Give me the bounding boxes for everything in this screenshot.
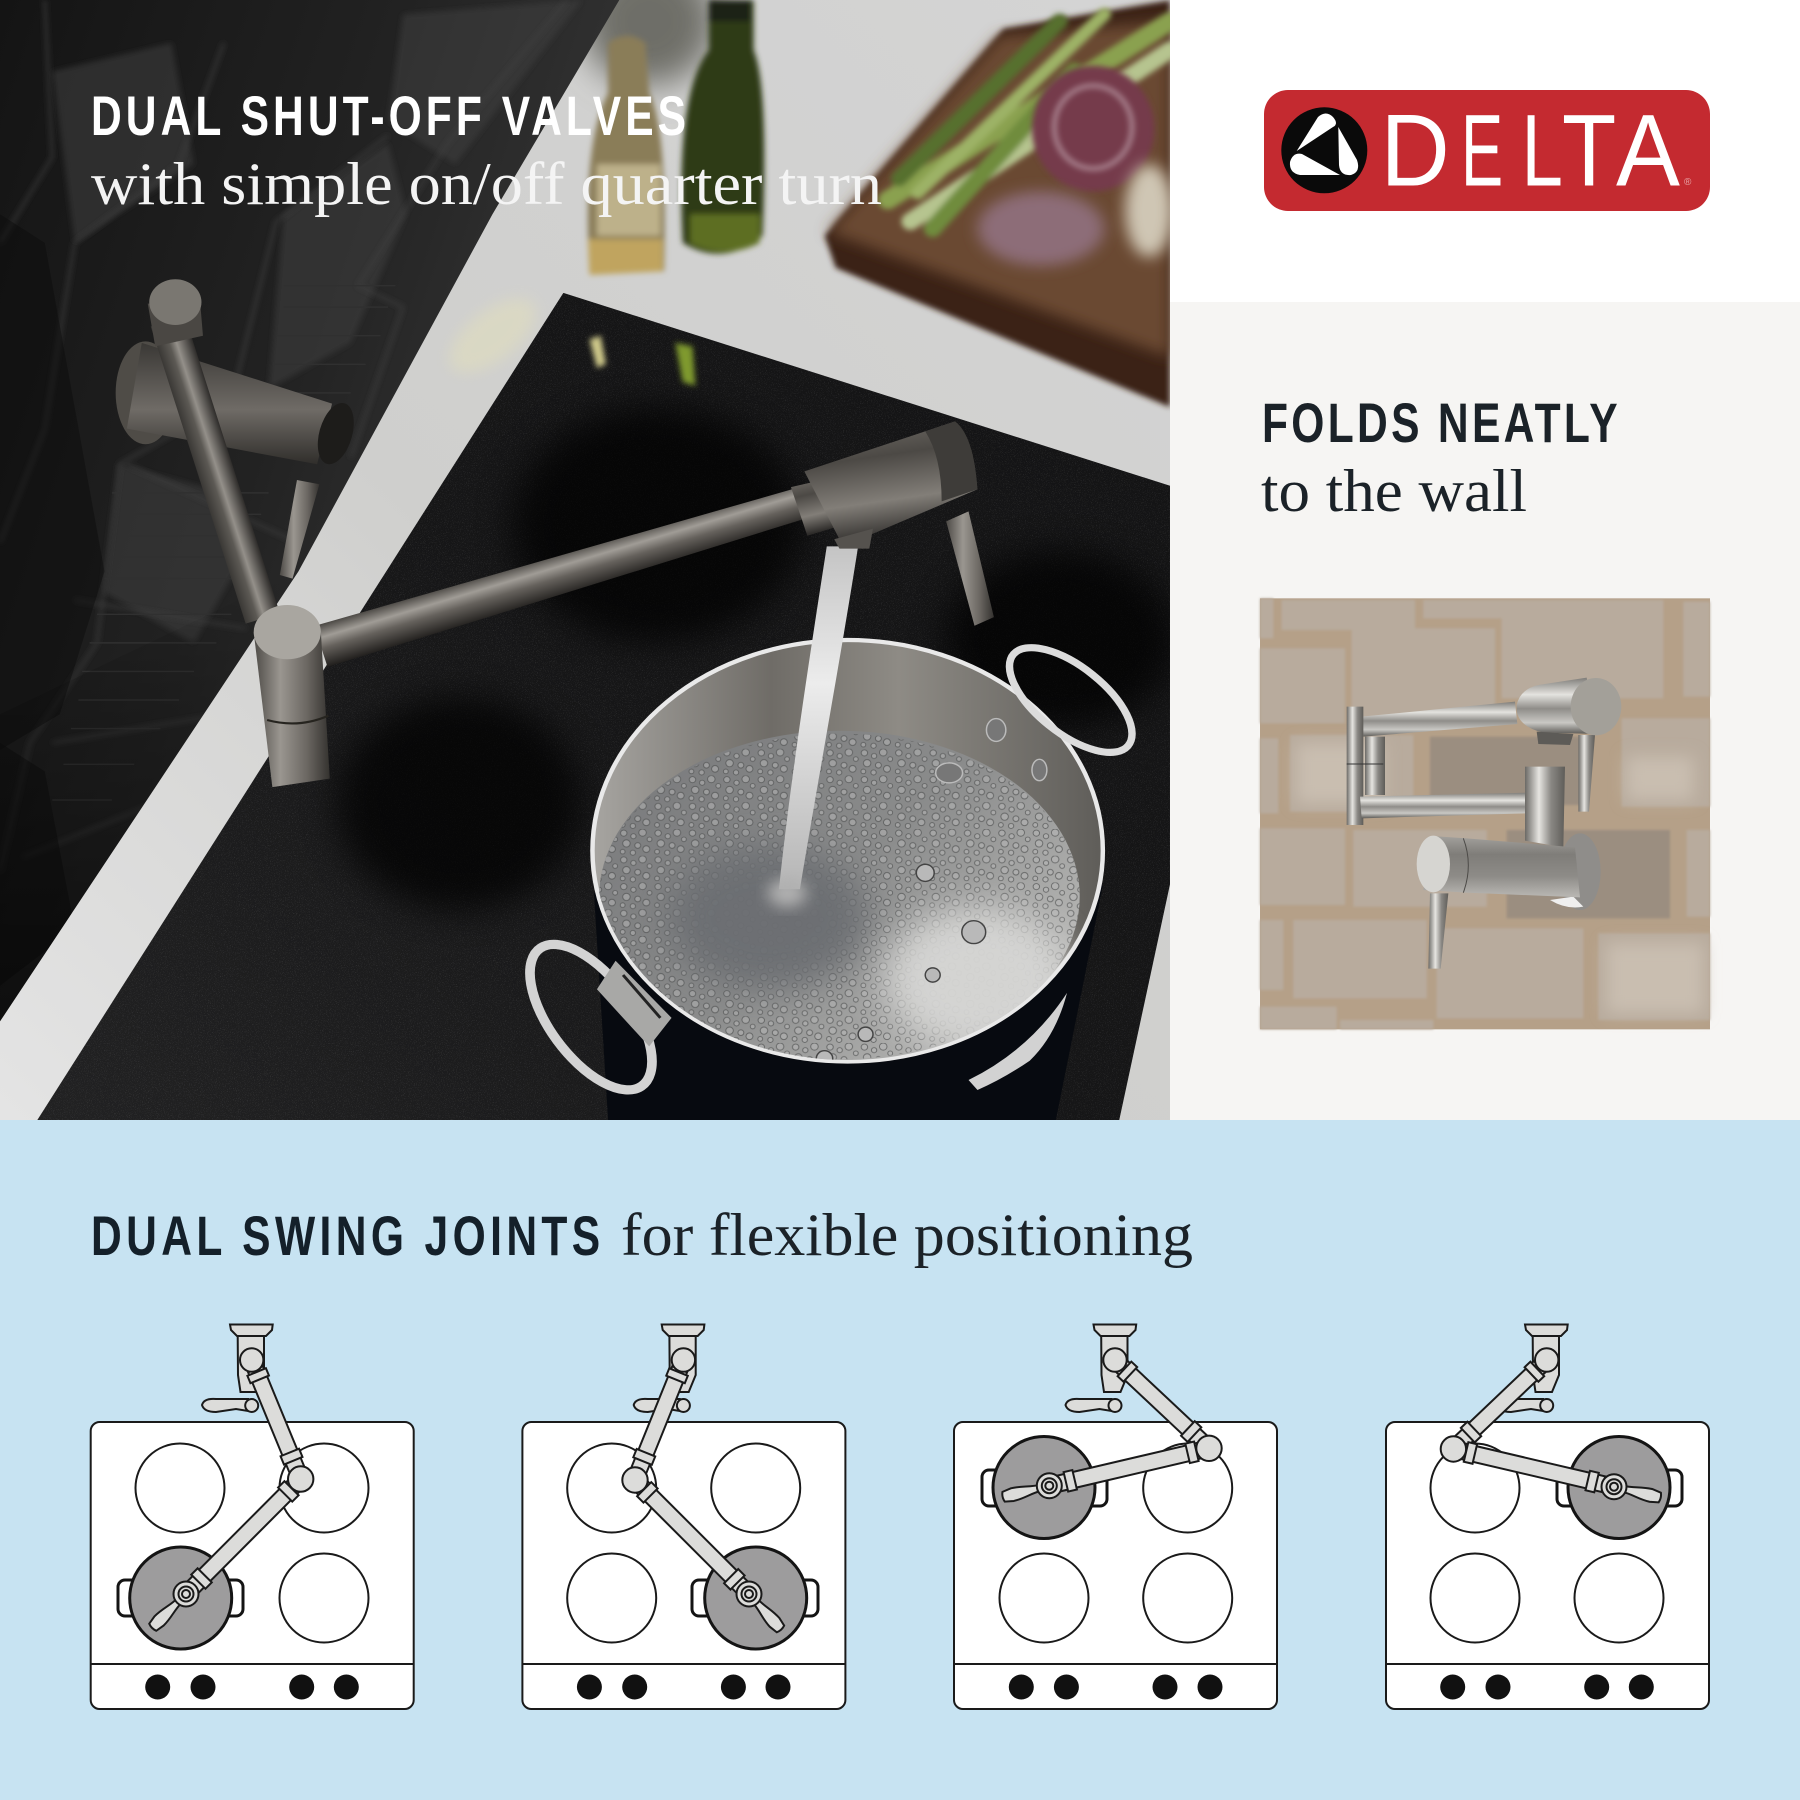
diagram 2: pot on front-right burner — [522, 1324, 845, 1709]
stove — [91, 1422, 414, 1709]
swing arm — [1441, 1348, 1662, 1504]
wall mount and valve — [1066, 1324, 1136, 1412]
photo: yellow reflection on counter — [456, 304, 529, 366]
photo: cooking pot — [589, 640, 1103, 1120]
logo wordmark: E — [1461, 93, 1503, 207]
diagram 3: pot on rear-left burner — [954, 1324, 1277, 1709]
faucet upper arm — [1347, 702, 1517, 825]
brick wall — [1260, 598, 1710, 1029]
photo: glass cooktop — [38, 293, 1170, 1120]
photo: countertop — [0, 0, 1170, 1120]
faucet head — [1517, 678, 1621, 812]
photo: faucet elbow — [254, 605, 330, 787]
heading: folds neatly: FOLDS NEATLY — [1262, 391, 1618, 454]
panel: logo background — [1170, 0, 1800, 302]
heading: dual shut-off valves: DUAL SHUT-OFF VALVES — [91, 84, 686, 147]
swing arm — [1001, 1348, 1222, 1503]
stove — [1386, 1422, 1709, 1709]
faucet wall valve — [1417, 833, 1601, 969]
panel: kitchen photo — [0, 0, 1175, 1120]
logo wordmark: D — [1380, 93, 1450, 207]
logo wordmark: L — [1522, 93, 1563, 207]
text: for flexible positioning: for flexible positioning — [621, 1202, 1193, 1268]
logo wordmark — [1380, 93, 1680, 208]
diagram 4: pot on rear-right burner — [1386, 1324, 1709, 1709]
photo: folded faucet on brick wall — [1260, 598, 1710, 1029]
photo: shadow at top of counter — [582, 0, 716, 86]
pot — [118, 1547, 243, 1649]
text: with simple on/off quarter turn: with simple on/off quarter turn — [91, 151, 882, 217]
logo: Delta — [1264, 90, 1710, 211]
photo: pot handle left — [525, 940, 672, 1094]
logo badge — [1264, 90, 1710, 211]
photo: tiled wall — [0, 0, 627, 1029]
wall mount and valve — [1497, 1324, 1568, 1412]
photo: green bottle — [681, 0, 764, 254]
stove — [954, 1422, 1277, 1709]
pot — [1557, 1436, 1682, 1538]
stove — [522, 1422, 845, 1709]
panel: dual swing joints background — [0, 1120, 1800, 1800]
photo: clear wine bottle — [588, 36, 665, 275]
swing arm — [147, 1348, 313, 1633]
registered mark: ® — [1684, 177, 1692, 188]
pot — [692, 1547, 818, 1649]
photo: cutting board with vegetables — [825, 0, 1173, 407]
photo: long faucet arm — [314, 479, 820, 667]
heading: dual swing joints: DUAL SWING JOINTS — [91, 1204, 600, 1267]
photo: upper faucet arm — [148, 279, 280, 624]
faucet lower arm — [1360, 767, 1565, 847]
icon: delta triangle mark — [1281, 107, 1367, 193]
wall mount and valve — [634, 1324, 704, 1412]
photo: water stream — [768, 546, 858, 907]
photo: wall valve — [116, 341, 360, 579]
panel: folds neatly background — [1170, 302, 1800, 1120]
photo: faucet head — [791, 421, 994, 626]
logo wordmark: T — [1562, 94, 1616, 208]
logo wordmark: A — [1616, 93, 1680, 207]
photo: pot handle right — [1006, 644, 1136, 756]
swing arm — [622, 1348, 786, 1634]
diagram 1: pot on front-left burner — [91, 1324, 414, 1709]
wall mount and valve — [202, 1324, 273, 1412]
text: to the wall: to the wall — [1261, 458, 1527, 524]
pot — [982, 1436, 1107, 1538]
